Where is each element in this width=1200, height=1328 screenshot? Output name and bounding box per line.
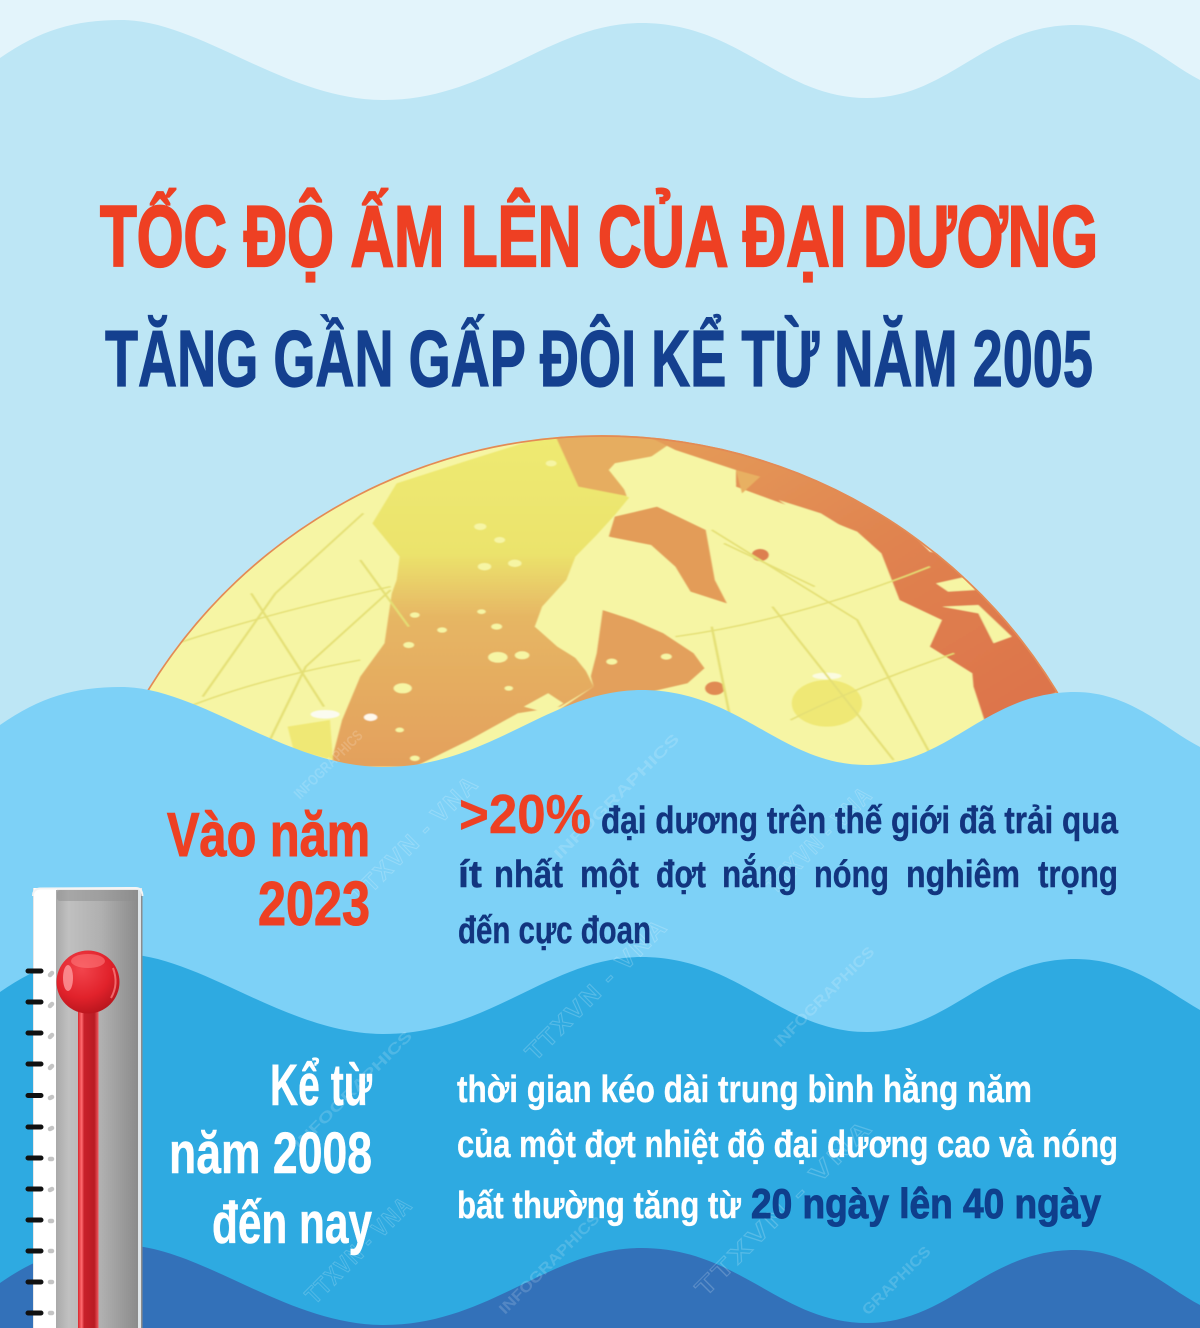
watermark labels: INFOGRAPHICS	[551, 731, 683, 863]
title	[100, 189, 1098, 403]
text block: 20% of oceans	[458, 783, 1119, 952]
section label: 2023: 2023	[258, 870, 370, 939]
text block: heatwave duration: bất thường tăng từ	[457, 1185, 741, 1227]
section label: since 2008: đến nay	[212, 1191, 372, 1256]
watermark labels: INFOGRAPHICS	[771, 943, 878, 1051]
watermark labels	[291, 727, 934, 1319]
text block: 20% of oceans: nắng	[722, 852, 797, 896]
text block: 20% of oceans: trọng	[1038, 854, 1118, 896]
text block: 20% of oceans: đợt	[656, 854, 706, 896]
section label: 2023: Vào năm	[167, 801, 370, 870]
watermark labels: INFOGRAPHICS	[496, 1210, 603, 1318]
watermarks: TTXVN - VNA	[760, 781, 878, 899]
section label: since 2008	[169, 1053, 372, 1256]
section label: 2023	[167, 801, 370, 939]
watermark labels: INFOGRAPHICS	[291, 1028, 416, 1153]
thermometer grey dots	[50, 973, 52, 1313]
text block: heatwave duration: thời gian kéo dài trung bình hằng năm	[457, 1067, 1032, 1111]
wave: sky blue layer	[0, 687, 1200, 1328]
thermometer top rim	[33, 888, 142, 896]
text block: 20% of oceans: ít	[458, 854, 482, 896]
watermark labels: GRAPHICS	[859, 1243, 934, 1319]
thermometer red bulb	[56, 950, 120, 1014]
wave: mid blue layer	[0, 954, 1200, 1328]
watermarks: TTXVN - VNA	[345, 770, 484, 909]
wave: deep blue layer	[0, 1245, 1200, 1328]
watermark labels: INFOGRAPHICS	[291, 727, 366, 803]
text block: 20% of oceans: nghiêm	[906, 854, 1020, 896]
text block: 20% of oceans: đến cực đoan	[458, 910, 651, 952]
watermarks: TTXVN - VNA	[520, 913, 674, 1066]
watermarks	[300, 770, 879, 1309]
section label: since 2008: Kể từ	[270, 1053, 372, 1118]
text block: heatwave duration	[457, 1067, 1118, 1227]
section label: since 2008: năm 2008	[169, 1121, 372, 1186]
watermarks: TTXVN - VNA	[300, 1191, 418, 1309]
watermarks: TTXVN - VNA	[690, 1113, 879, 1302]
highlight: 20 to 40 days: 20 ngày lên 40 ngày	[751, 1180, 1102, 1227]
text block: 20% of oceans: nhất	[494, 854, 563, 896]
text block: 20% of oceans: nóng	[814, 854, 889, 896]
text block: 20% of oceans: một	[580, 854, 639, 896]
thermometer tick marks	[28, 971, 41, 1313]
icon: thermometer	[28, 888, 142, 1328]
illustration: overheating globe	[148, 435, 1058, 767]
thermometer red stem	[78, 1005, 98, 1328]
stat: more than 20%: >20%	[459, 783, 591, 845]
